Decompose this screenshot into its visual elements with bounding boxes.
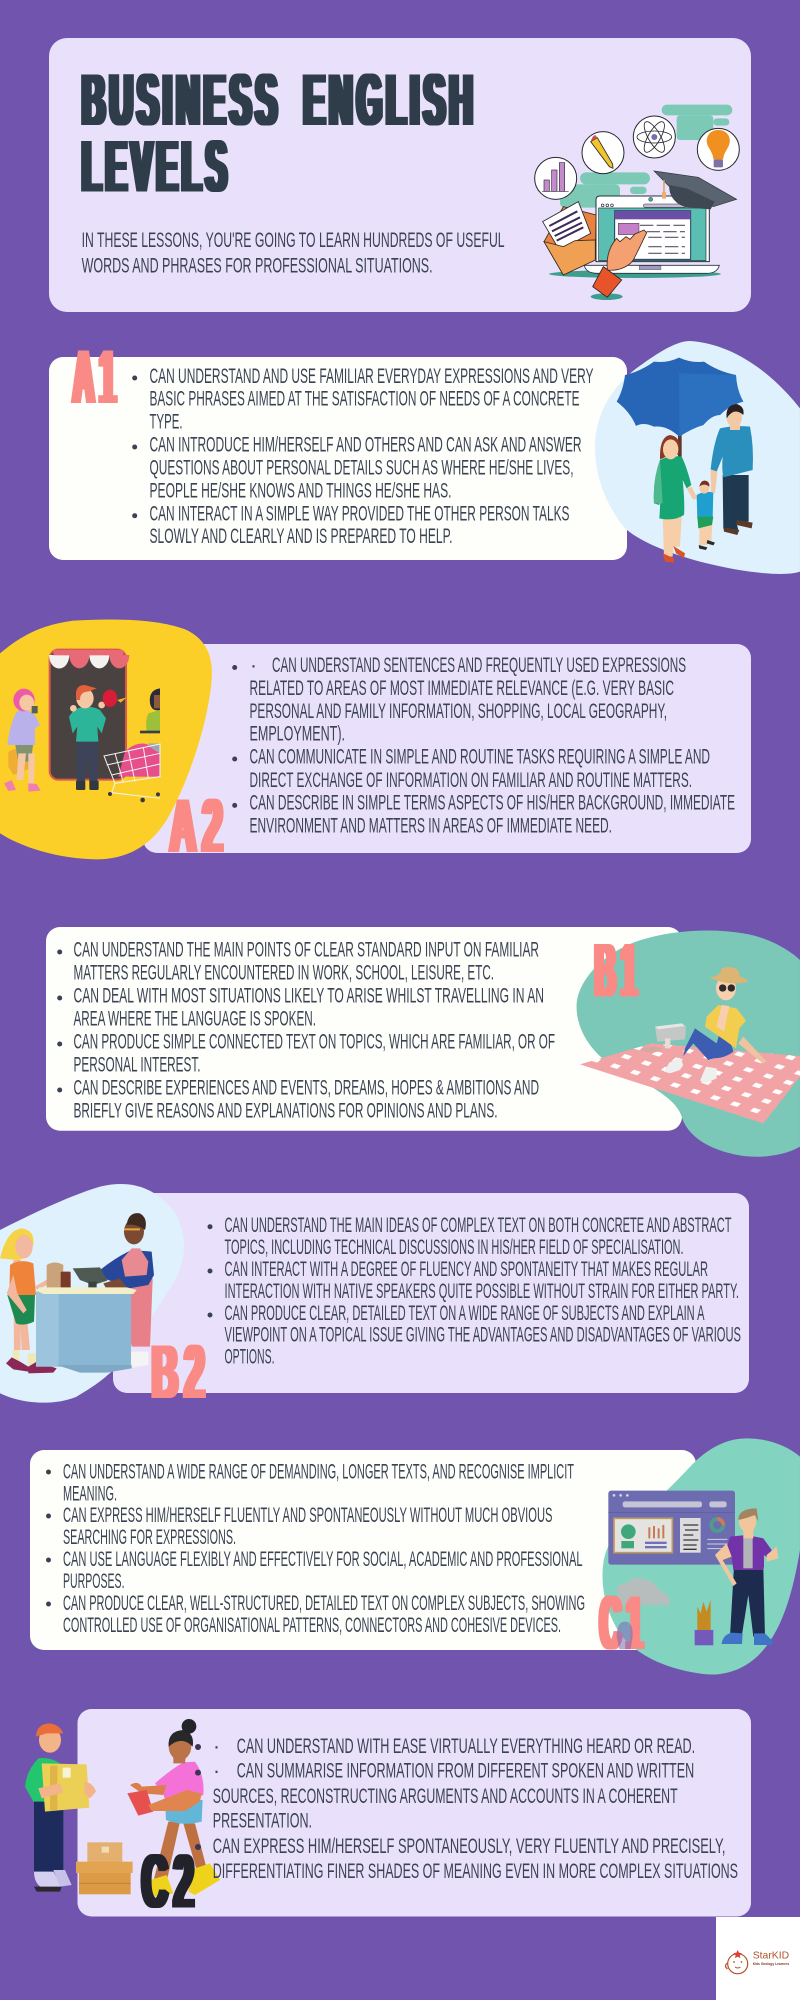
panel: C2 level xyxy=(25,1709,751,1925)
panel: B1 level: B1 xyxy=(595,929,642,1014)
panel: A1 level xyxy=(49,335,800,574)
subtitle text: IN THESE LESSONS, YOU'RE GOING TO LEARN HUNDREDS OF USEFUL xyxy=(82,229,505,252)
text block xyxy=(232,654,735,838)
panel: C1 level xyxy=(30,1438,800,1675)
blob xyxy=(595,341,800,574)
card xyxy=(78,1709,751,1916)
card xyxy=(113,1193,749,1393)
logo: StarKID xyxy=(716,1917,800,2000)
panel: B2 level xyxy=(0,1184,749,1415)
text block xyxy=(132,365,593,548)
text block: SLOWLY AND CLEARLY AND IS PREPARED TO HELP. xyxy=(150,525,452,548)
card xyxy=(49,357,627,560)
subtitle text xyxy=(82,229,505,278)
panel: C1 level: C1 xyxy=(600,1581,648,1666)
icon: shop scene xyxy=(4,650,160,802)
text block: PERSONAL INTEREST. xyxy=(74,1053,200,1076)
blob xyxy=(0,619,212,859)
card xyxy=(30,1450,696,1650)
text block: TYPE. xyxy=(150,411,182,434)
icon: delivery man and parcels xyxy=(25,1719,220,1897)
level label xyxy=(600,1581,648,1666)
card xyxy=(46,927,682,1131)
text block xyxy=(195,1735,738,1883)
logo: StarKID: Kids Geology Learners xyxy=(753,1962,789,1966)
panel: B2 level: B2 xyxy=(152,1330,211,1415)
text block: PURPOSES. xyxy=(63,1570,124,1593)
panel: A2 level xyxy=(0,619,751,869)
text block xyxy=(46,1460,585,1637)
blob xyxy=(0,1184,184,1403)
text block: PRESENTATION. xyxy=(213,1810,312,1833)
heading: LEVELS xyxy=(82,126,231,208)
logo: StarKID: StarKID xyxy=(753,1950,790,1962)
text block xyxy=(208,1214,741,1369)
subtitle text: WORDS AND PHRASES FOR PROFESSIONAL SITUATIONS. xyxy=(82,255,433,278)
text block: SEARCHING FOR EXPRESSIONS. xyxy=(63,1526,236,1549)
icon: online learning illustration xyxy=(535,105,739,300)
text block: OPTIONS. xyxy=(224,1346,274,1369)
text block: AREA WHERE THE LANGUAGE IS SPOKEN. xyxy=(74,1008,316,1031)
icon: dashboard and presenter xyxy=(608,1491,778,1645)
text block: · xyxy=(250,654,257,677)
heading xyxy=(82,60,477,208)
text block: MEANING. xyxy=(63,1482,117,1505)
panel: C2 level: C2 xyxy=(142,1840,200,1925)
icon: family under umbrella xyxy=(617,358,753,563)
blob xyxy=(602,1438,800,1675)
icon: picnic person xyxy=(580,967,800,1123)
card xyxy=(143,644,751,853)
text block: · xyxy=(213,1760,220,1783)
text block: PEOPLE HE/SHE KNOWS AND THINGS HE/SHE HAS. xyxy=(150,480,452,502)
panel: A2 level: A2 xyxy=(170,784,229,869)
panel: B1 level xyxy=(46,927,800,1157)
panel: A1 level: A1 xyxy=(73,335,121,420)
panel: title xyxy=(49,38,751,312)
text block xyxy=(57,939,555,1123)
icon: shop counter scene xyxy=(0,1213,154,1373)
text block: · xyxy=(213,1735,220,1758)
text block: EMPLOYMENT). xyxy=(250,723,345,746)
blob xyxy=(577,931,800,1157)
